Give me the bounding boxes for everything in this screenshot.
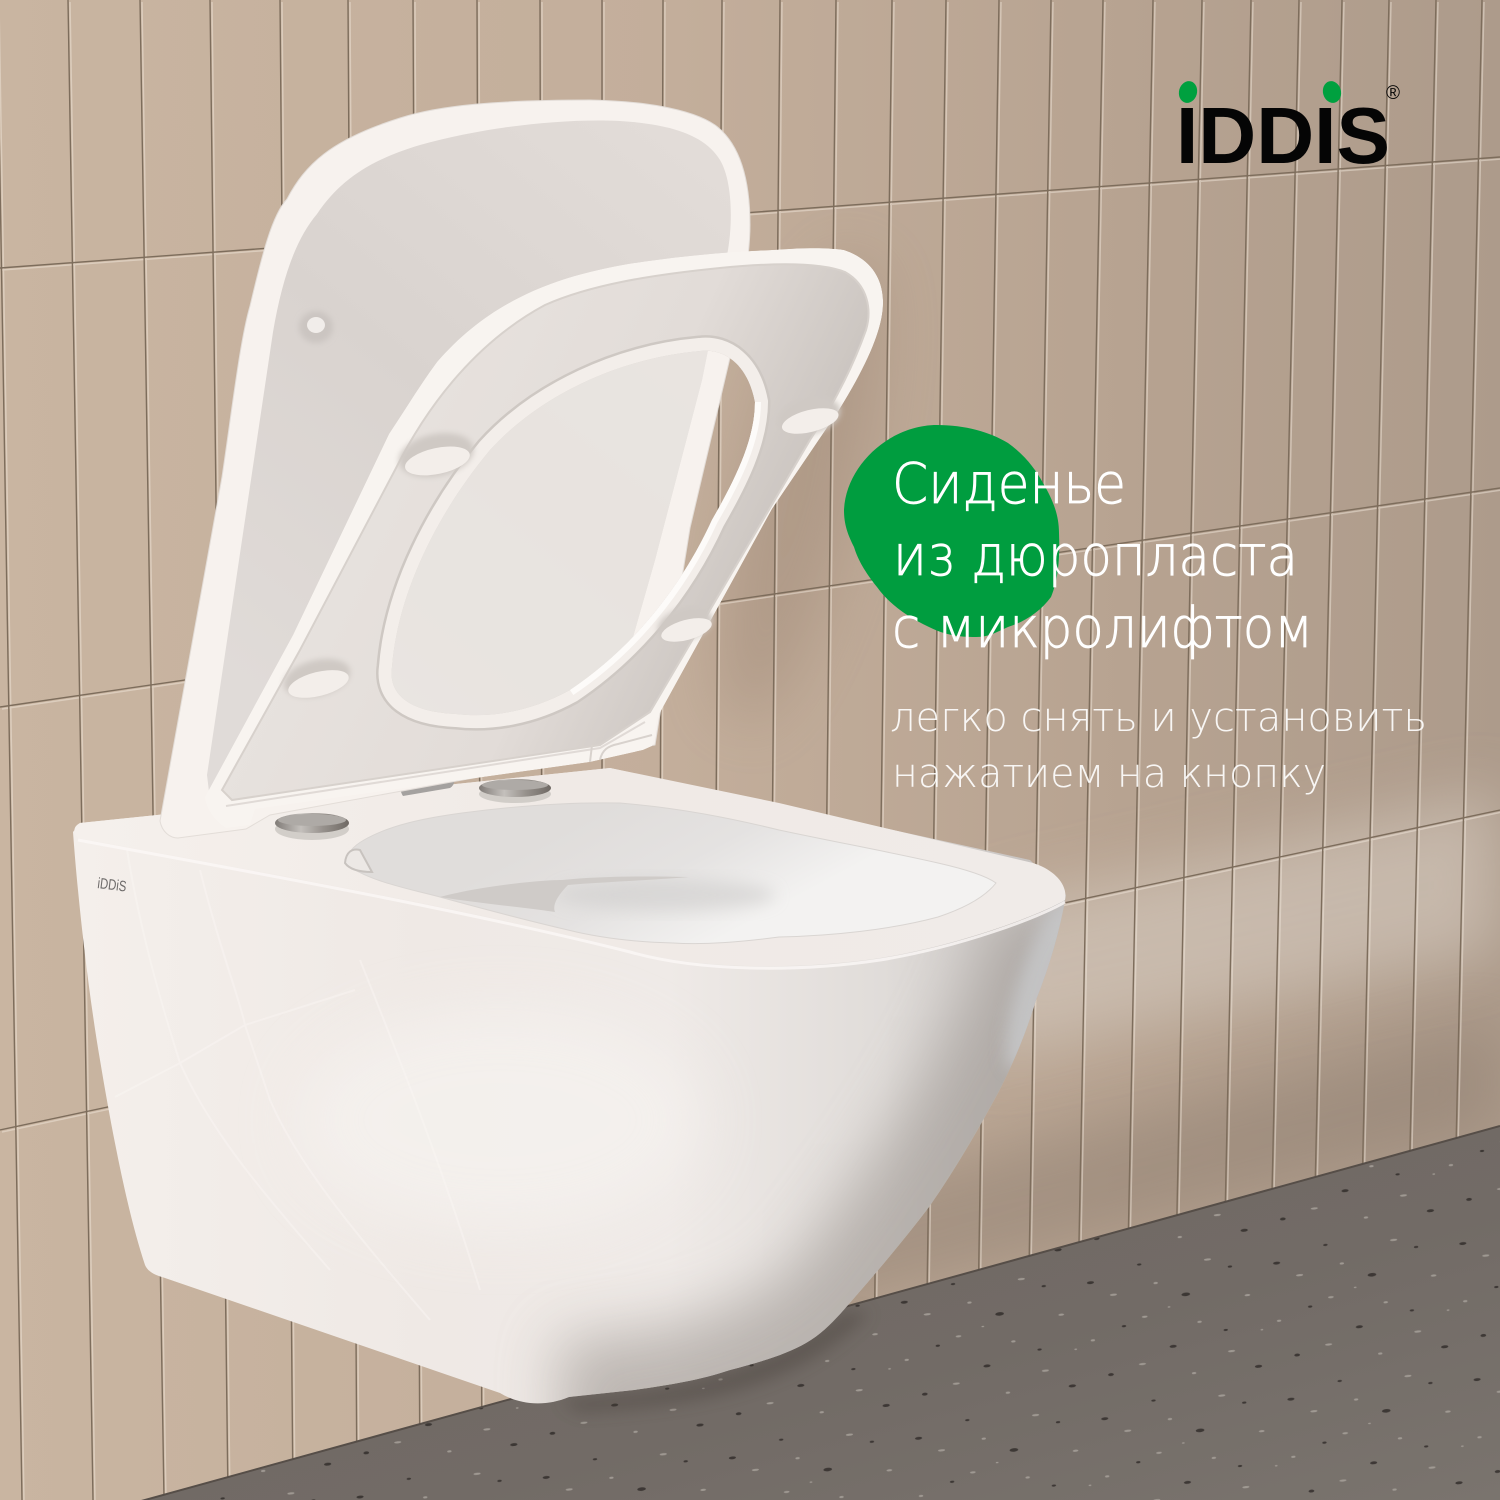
bowl body: [73, 768, 1066, 1403]
rim water outlet: [345, 850, 372, 872]
bumper bottom-left: [280, 652, 354, 704]
heading: с микролифтом: [892, 596, 1313, 661]
release button: [400, 773, 454, 796]
subheading: легко снять и установить: [890, 695, 1427, 741]
subheading: нажатием на кнопку: [892, 751, 1326, 797]
green accent blob: [844, 425, 1059, 637]
brand logo: ®: [1386, 83, 1400, 104]
heading: из дюропласта: [893, 524, 1298, 589]
terrazzo floor: [0, 1126, 1500, 1500]
bumper bottom-right: [654, 601, 716, 647]
flush area shadow: [555, 879, 775, 911]
bumper top-left: [395, 427, 478, 484]
basin: [345, 803, 996, 944]
seat hole groove: [392, 351, 755, 715]
seat inner panel: [222, 264, 868, 800]
small bowl logo: iDDiS: [97, 875, 127, 896]
rim front shading: [78, 840, 1065, 968]
rim top surface: [74, 768, 1065, 966]
raised lid: [160, 100, 755, 838]
toilet bowl: [73, 768, 1089, 1405]
lid bumper: [299, 311, 333, 343]
heading: [892, 452, 1313, 661]
seat hinge cover: [590, 735, 652, 762]
brand logo: IDDIS: [1176, 91, 1390, 180]
seat lower ledge: [226, 722, 645, 806]
hinges: [275, 773, 551, 840]
subheading: [890, 695, 1427, 797]
lid area seen through seat opening: [392, 351, 708, 715]
left hinge: [275, 813, 349, 840]
raised seat: [205, 248, 883, 828]
heading: Сиденье: [892, 452, 1126, 517]
flush shelf: [440, 876, 689, 912]
bumper top-right: [774, 391, 844, 441]
lid inner recess: [207, 120, 731, 800]
seat hole rim: [392, 351, 755, 715]
right hinge: [479, 779, 551, 803]
